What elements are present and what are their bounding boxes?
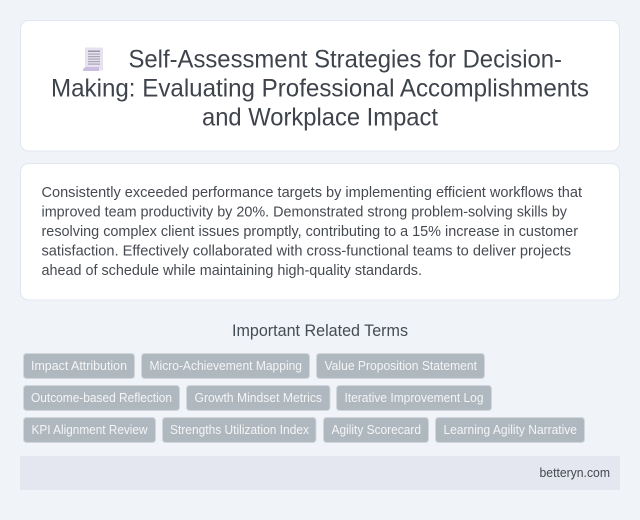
icon: document scroll (83, 48, 103, 71)
tag: Value Proposition Statement: Value Proposition Statement (324, 358, 477, 373)
tag list (24, 354, 584, 442)
tag: Value Proposition Statement (316, 354, 484, 378)
tag: Learning Agility Narrative (436, 418, 584, 442)
tag: Agility Scorecard: Agility Scorecard (332, 422, 421, 437)
text block: accomplishments summary: ahead of schedule while maintaining high-quality standards. (42, 263, 422, 279)
tag: Agility Scorecard (324, 418, 428, 442)
tag: Outcome-based Reflection: Outcome-based Reflection (31, 390, 172, 405)
tag: Micro-Achievement Mapping: Micro-Achievement Mapping (150, 358, 302, 373)
text block: accomplishments summary: Consistently exceeded performance targets by implementing efficient workflows that (42, 185, 582, 201)
title: Self-Assessment Strategies for Decision- (128, 46, 562, 74)
tag: KPI Alignment Review (24, 418, 156, 442)
tag: Micro-Achievement Mapping (142, 354, 310, 378)
heading: important related terms: Important Related Terms (232, 322, 408, 340)
tag: Growth Mindset Metrics: Growth Mindset Metrics (194, 390, 322, 405)
tag: Learning Agility Narrative: Learning Agility Narrative (444, 422, 577, 437)
tag: Growth Mindset Metrics (186, 386, 330, 410)
tag: Impact Attribution: Impact Attribution (31, 358, 127, 373)
tag: Strengths Utilization Index: Strengths Utilization Index (170, 422, 309, 437)
text block: accomplishments summary (42, 185, 582, 279)
footer bar (20, 456, 620, 490)
panel: summary text card (20, 164, 620, 300)
title: and Workplace Impact (202, 104, 438, 132)
text block: accomplishments summary: improved team productivity by 20%. Demonstrated strong problem-solving skills by (42, 204, 568, 220)
title (51, 46, 589, 132)
tag: KPI Alignment Review: KPI Alignment Review (32, 422, 148, 437)
tag: Impact Attribution (24, 354, 134, 378)
tag: Iterative Improvement Log (336, 386, 492, 410)
panel: title card (20, 20, 620, 151)
text block: accomplishments summary: satisfaction. Effectively collaborated with cross-functional teams to deliver projects (42, 244, 571, 260)
tag: Strengths Utilization Index (162, 418, 316, 442)
tag: Outcome-based Reflection (24, 386, 180, 410)
text block: accomplishments summary: resolving complex client issues promptly, contributing to a 15% increase in customer (42, 224, 578, 240)
tag: Iterative Improvement Log: Iterative Improvement Log (344, 390, 484, 405)
footer source text: betteryn.com (540, 465, 610, 480)
title: Making: Evaluating Professional Accomplishments (51, 76, 589, 102)
